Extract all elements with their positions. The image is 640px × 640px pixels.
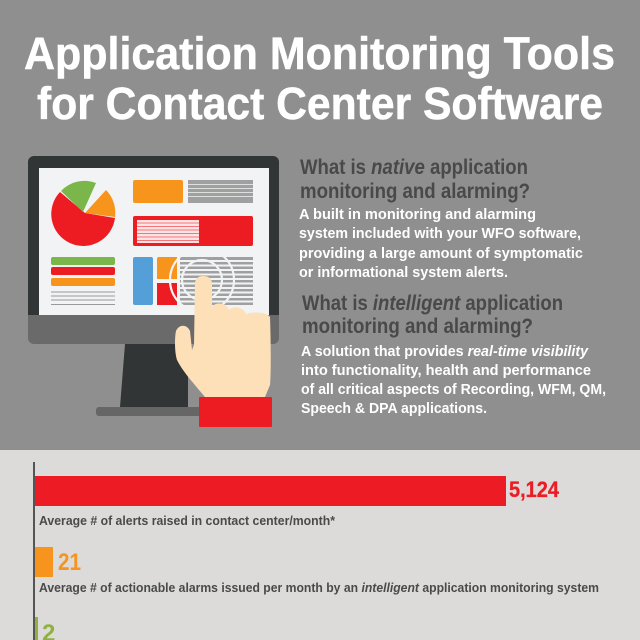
- label: alerts raised: Average # of alerts raised in contact center/month*: [39, 513, 336, 528]
- body: native: [299, 206, 583, 281]
- panel: bar chart background: [0, 450, 640, 640]
- heading: native: monitoring and alarming?: [300, 180, 530, 203]
- monitor frame: [28, 156, 279, 344]
- title: [24, 28, 615, 129]
- text block: intelligent monitoring: [301, 292, 606, 417]
- icon: monitor with dashboard and hand: [28, 156, 279, 427]
- text block: native monitoring: [299, 156, 583, 281]
- bar chart: [33, 462, 599, 640]
- heading: intelligent: monitoring and alarming?: [302, 315, 533, 338]
- dashboard widgets top: [133, 180, 253, 246]
- dashboard widgets left: [51, 257, 115, 304]
- body: intelligent: Speech & DPA applications.: [301, 400, 487, 417]
- body: native: A built in monitoring and alarming: [299, 206, 536, 223]
- hand cuff: [199, 397, 272, 427]
- bar: actionable alarms: 21: [58, 549, 81, 576]
- hand pointer: [175, 276, 271, 397]
- bar: alerts raised: 5,124: [509, 477, 560, 502]
- heading: native: [300, 156, 530, 203]
- title: for Contact Center Software: [37, 78, 603, 129]
- bar: actionable alarms: [35, 547, 81, 577]
- pie chart: [51, 181, 115, 246]
- body: intelligent: of all critical aspects of Recording, WFM, QM,: [301, 381, 606, 398]
- title: Application Monitoring Tools: [24, 28, 615, 79]
- monitor stand: [96, 344, 202, 416]
- body: intelligent: into functionality, health and performance: [301, 362, 591, 379]
- heading: native: What is native application: [300, 156, 528, 179]
- touch ripple circles: [170, 248, 234, 312]
- bar: critical alarms: [35, 617, 55, 640]
- body: intelligent: [301, 343, 606, 417]
- body: native: system included with your WFO software,: [299, 225, 581, 242]
- body: intelligent: A solution that provides real-time visibility: [301, 343, 589, 360]
- label: actionable alarms: Average # of actionable alarms issued per month by an intelligent application monitoring system: [39, 580, 599, 595]
- body: native: or informational system alerts.: [299, 264, 508, 281]
- heading: intelligent: What is intelligent application: [302, 292, 563, 315]
- panel: header background: [0, 0, 640, 450]
- body: native: providing a large amount of symptomatic: [299, 245, 583, 262]
- bar: alerts raised: [35, 476, 560, 506]
- heading: intelligent: [302, 292, 563, 338]
- dashboard widgets bottom: [133, 257, 253, 305]
- chart axis: [33, 462, 35, 640]
